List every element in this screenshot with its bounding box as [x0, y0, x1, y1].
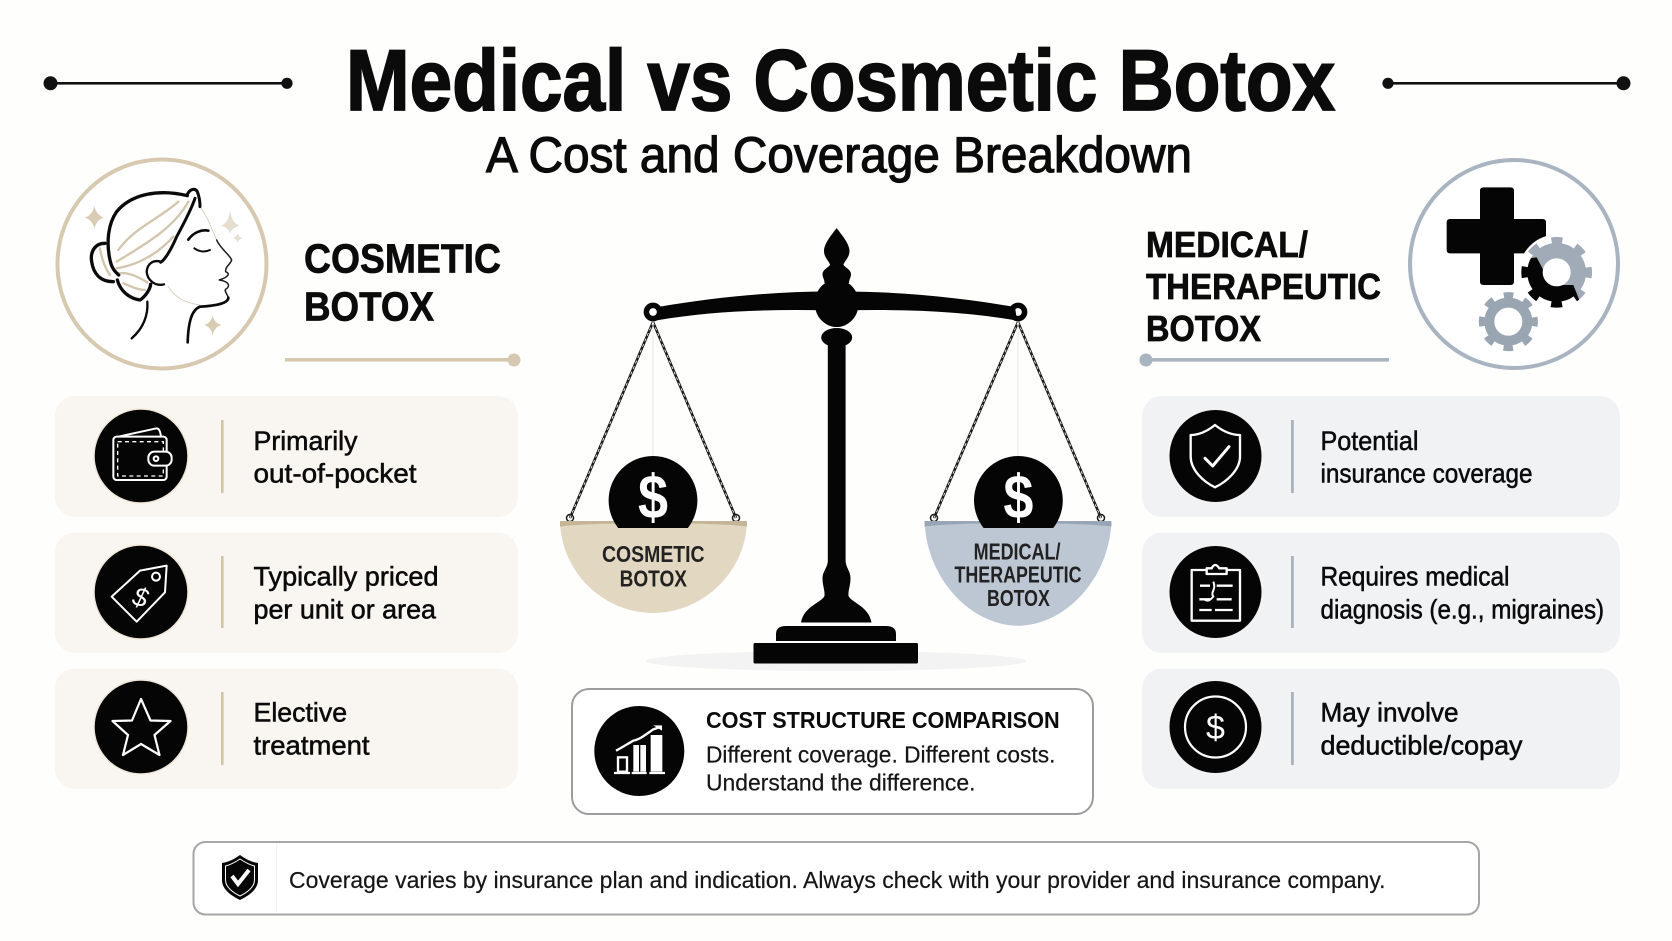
- text: [1320, 426, 1532, 488]
- text: Requires medical: [1320, 562, 1510, 592]
- callout text: Understand the difference.: [706, 770, 976, 796]
- icon: shield: [222, 855, 258, 900]
- text: treatment: [254, 730, 370, 760]
- text: deductible/copay: [1320, 730, 1523, 760]
- text: [254, 562, 438, 624]
- panel: medical card 1: [1142, 396, 1620, 517]
- divider: [1291, 692, 1294, 765]
- balance scale: [560, 228, 1111, 671]
- divider: [1291, 420, 1294, 493]
- heading rule: medical: [1140, 354, 1389, 366]
- scale stand and beam: [646, 228, 1025, 664]
- icon: medical cross and gears medallion: [1410, 160, 1618, 368]
- icon: price tag: $: [129, 581, 152, 614]
- coin: [608, 456, 698, 528]
- text: [1320, 562, 1604, 624]
- disclaimer banner: [194, 842, 1479, 914]
- title rule: right: [1382, 76, 1630, 90]
- heading: medical/therapeutic botox: [1146, 224, 1381, 349]
- pan label: COSMETIC: [602, 541, 705, 567]
- heading: medical/therapeutic botox: THERAPEUTIC: [1146, 266, 1381, 307]
- heading: medical/therapeutic botox: MEDICAL/: [1146, 224, 1308, 265]
- text: Potential: [1320, 426, 1418, 456]
- panel: cosmetic card 1: [55, 396, 518, 517]
- left pan: [560, 456, 747, 613]
- coin: [974, 456, 1063, 528]
- text: Typically priced: [254, 562, 438, 592]
- right chains: [930, 322, 1104, 522]
- callout text: COST STRUCTURE COMPARISON: [706, 707, 1060, 733]
- right pan: [925, 456, 1111, 626]
- divider: [221, 692, 224, 765]
- panel: cosmetic card 3: [55, 668, 518, 789]
- coin: $: [1003, 464, 1033, 532]
- heading: cosmetic botox: COSMETIC: [304, 236, 501, 282]
- pan label: BOTOX: [987, 585, 1050, 611]
- left chains: [566, 322, 740, 522]
- title rule: left: [44, 76, 293, 90]
- title: Medical vs Cosmetic Botox: [346, 33, 1335, 129]
- text: [1320, 698, 1523, 760]
- pan label: [954, 538, 1082, 611]
- icon: cosmetic face medallion: [58, 160, 266, 368]
- panel: medical card 3: [1142, 668, 1620, 789]
- heading rule: cosmetic: [285, 354, 520, 366]
- callout: cost structure comparison: [572, 689, 1093, 814]
- text: diagnosis (e.g., migraines): [1320, 594, 1604, 624]
- heading: cosmetic botox: [304, 236, 501, 330]
- icon: shield check: [1170, 410, 1262, 502]
- pan label: BOTOX: [620, 566, 688, 592]
- pan label: [602, 541, 705, 592]
- pan label: THERAPEUTIC: [954, 562, 1082, 588]
- coin: $: [638, 464, 668, 532]
- scale shadow: [646, 651, 1026, 671]
- subtitle: A Cost and Coverage Breakdown: [486, 127, 1192, 183]
- text: per unit or area: [254, 594, 437, 624]
- icon: price tag: [94, 545, 188, 639]
- text: Primarily: [254, 426, 358, 456]
- text: out-of-pocket: [254, 458, 417, 488]
- icon: bar chart with rising line: [594, 706, 684, 796]
- icon: clipboard: [1170, 546, 1262, 638]
- heading: medical/therapeutic botox: BOTOX: [1146, 308, 1261, 349]
- disclaimer text: Coverage varies by insurance plan and indication. Always check with your provider and insurance company.: [289, 867, 1386, 893]
- panel: cosmetic card 2: [55, 532, 518, 653]
- text: [254, 698, 370, 760]
- icon: star: [94, 680, 188, 774]
- text: May involve: [1320, 698, 1458, 728]
- icon: wallet: [94, 409, 188, 503]
- callout text: Different coverage. Different costs.: [706, 741, 1055, 767]
- text: insurance coverage: [1320, 458, 1532, 488]
- divider: [221, 556, 224, 628]
- callout text: [706, 707, 1060, 796]
- text: [254, 426, 417, 488]
- divider: [1291, 556, 1294, 628]
- text: Elective: [254, 698, 347, 728]
- panel: medical card 2: [1142, 532, 1620, 653]
- icon: dollar circle: $: [1206, 709, 1225, 747]
- heading: cosmetic botox: BOTOX: [304, 284, 434, 330]
- icon: dollar circle: [1170, 681, 1262, 773]
- pan label: MEDICAL/: [974, 538, 1061, 564]
- divider: [221, 420, 224, 493]
